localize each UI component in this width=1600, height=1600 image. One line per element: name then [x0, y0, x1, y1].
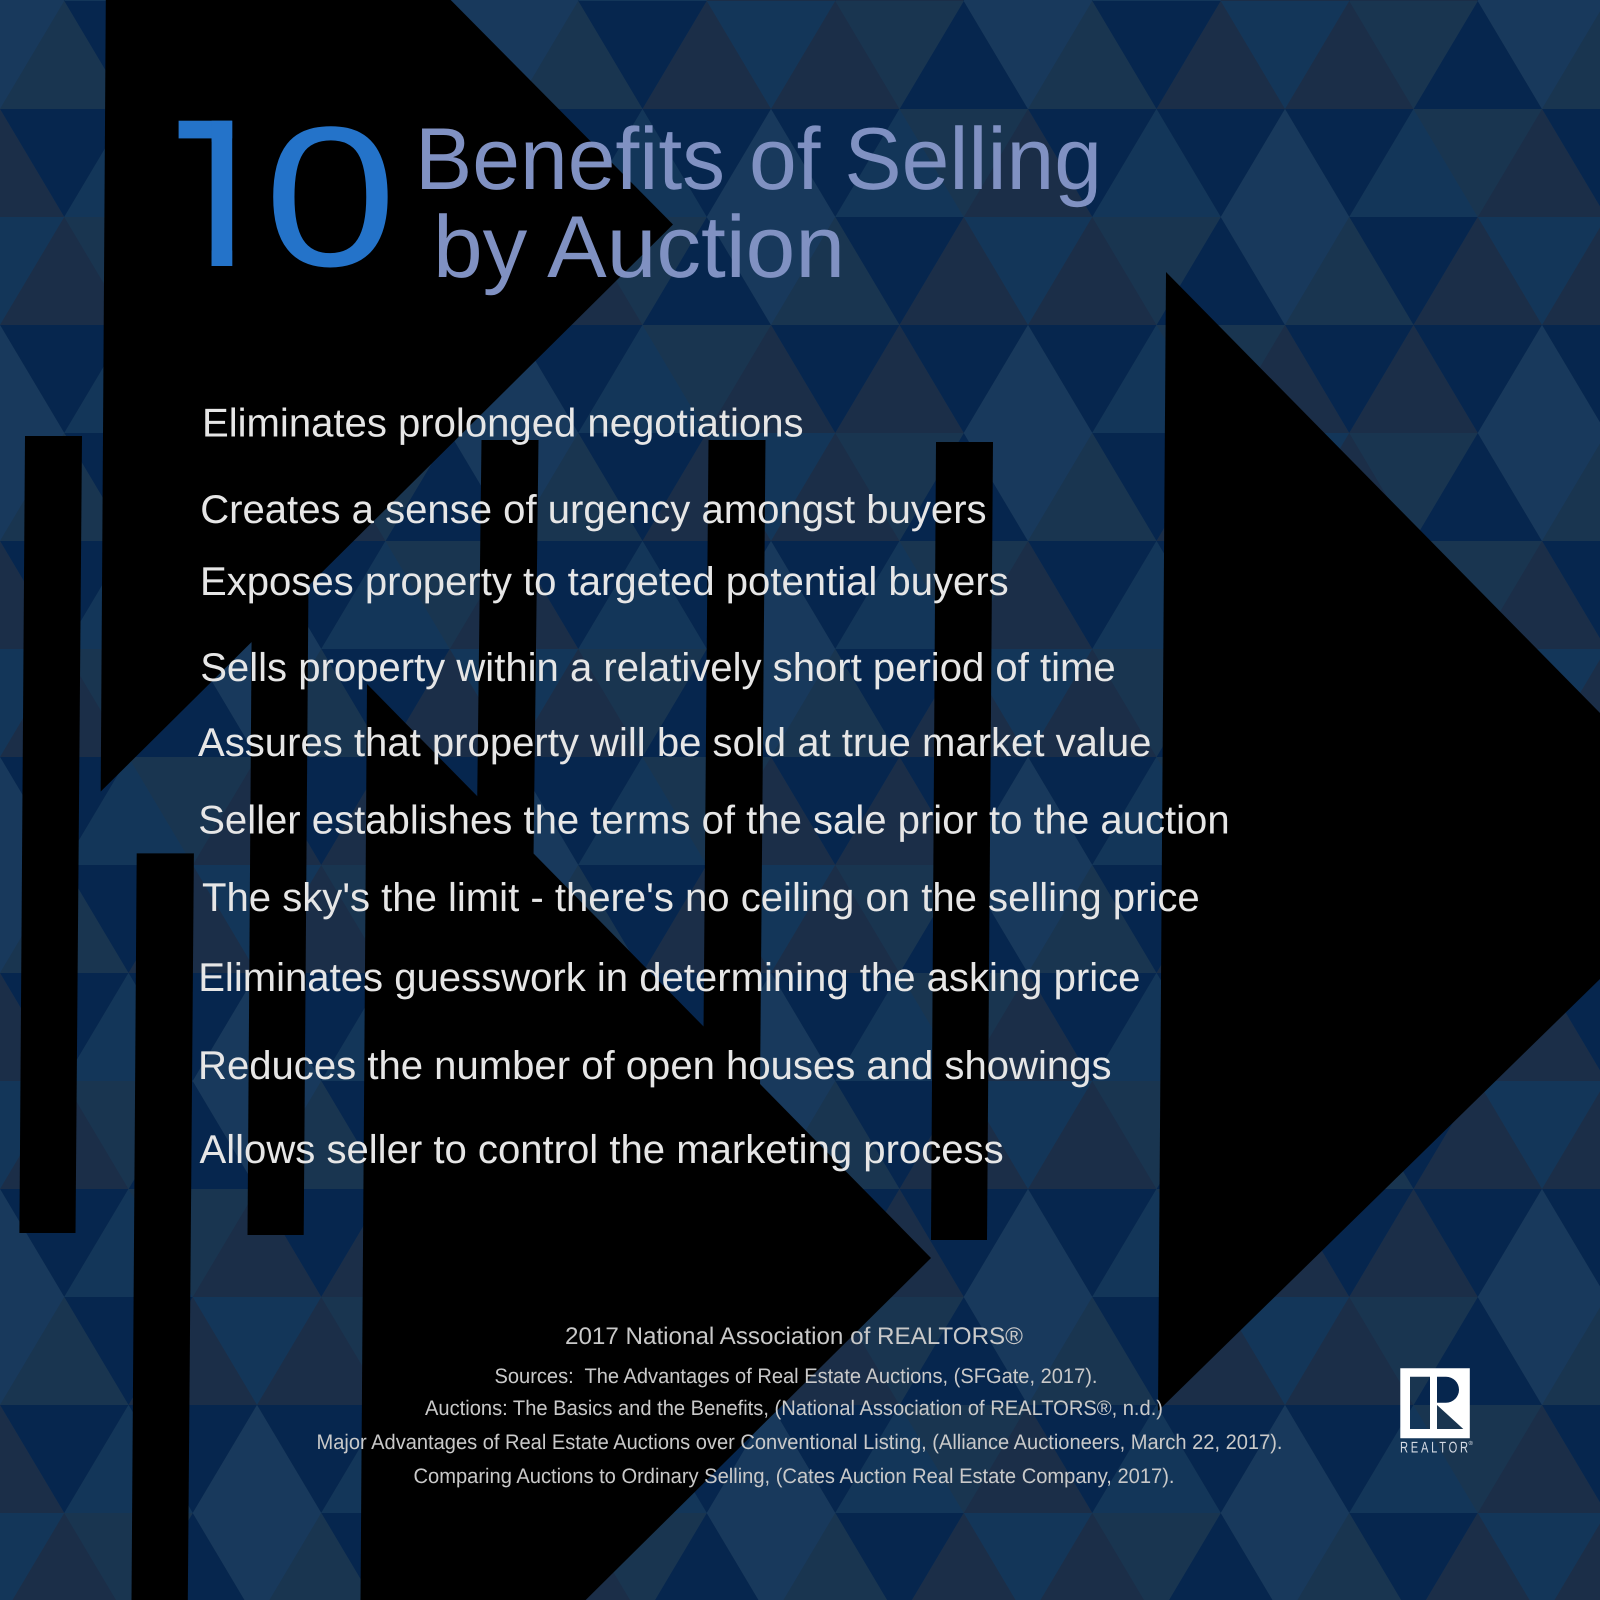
arrow: sixth bar [931, 442, 993, 1240]
arrow: fifth bar [703, 440, 766, 1090]
arrow: centre large arrow [360, 684, 931, 1600]
benefit 2: Creates a sense of urgency amongst buyers [200, 488, 987, 532]
title number 10: 0 [264, 86, 397, 308]
sources [316, 1365, 1282, 1488]
logo wordmark: REALTOR [1400, 1440, 1471, 1457]
benefits list [198, 401, 1230, 1172]
source 4: Comparing Auctions to Ordinary Selling, (Cates Auction Real Estate Company, 2017). [414, 1465, 1174, 1488]
source 3: Major Advantages of Real Estate Auctions over Conventional Listing, (Alliance Auctioneers, March 22, 2017). [316, 1431, 1282, 1454]
benefit 10: Allows seller to control the marketing process [200, 1128, 1004, 1172]
copyright line: 2017 National Association of REALTORS® [565, 1323, 1023, 1350]
benefit 5: Assures that property will be sold at true market value [198, 721, 1151, 765]
benefit 7: The sky's the limit - there's no ceiling on the selling price [202, 876, 1200, 920]
title number 10 [178, 120, 388, 268]
benefit 4: Sells property within a relatively short period of time [200, 646, 1116, 690]
benefit 8: Eliminates guesswork in determining the asking price [198, 956, 1140, 1000]
title text: Benefits of Selling [415, 109, 1102, 208]
source 2: Auctions: The Basics and the Benefits, (National Association of REALTORS®, n.d.) [425, 1397, 1163, 1420]
logo registered mark: ® [1468, 1440, 1474, 1447]
benefit 9: Reduces the number of open houses and showings [198, 1044, 1112, 1088]
source 1: Sources: The Advantages of Real Estate Auctions, (SFGate, 2017). [494, 1365, 1098, 1388]
benefit 6: Seller establishes the terms of the sale prior to the auction [198, 798, 1230, 842]
arrow: third bar [248, 580, 308, 1235]
benefit 1: Eliminates prolonged negotiations [202, 401, 804, 445]
arrow: right large arrow [1158, 272, 1600, 1411]
title text: by Auction [433, 197, 845, 296]
arrow: lower-left long bar [132, 853, 194, 1600]
title number 10: 1 [161, 78, 276, 310]
title [178, 120, 1096, 296]
icon: REALTOR logo [1400, 1368, 1474, 1457]
title text [415, 109, 1102, 296]
arrow: far-left bar [19, 436, 82, 1233]
logo mark [1400, 1368, 1470, 1438]
arrow: top-left large arrow [101, 0, 673, 792]
benefit 3: Exposes property to targeted potential buyers [200, 560, 1009, 604]
arrow: fourth bar [476, 440, 538, 900]
